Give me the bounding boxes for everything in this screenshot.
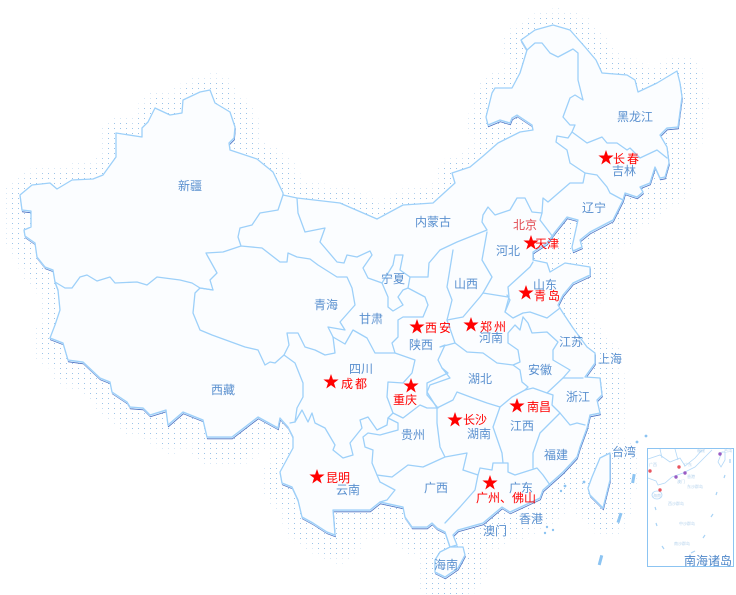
label: Liaoning: 辽宁 <box>582 200 606 215</box>
city: Xi'an: 西安 <box>425 320 453 335</box>
city: Kunming: 昆明 <box>326 471 350 485</box>
city: Tianjin: 天津 <box>535 237 559 251</box>
label: Fujian: 福建 <box>544 447 568 462</box>
inset title: 南海诸岛 <box>684 553 732 568</box>
city: Qingdao <box>518 285 562 303</box>
label: Sichuan: 四川 <box>349 362 373 376</box>
label: Hong Kong: 香港 <box>519 512 543 526</box>
city: Zhengzhou: 郑州 <box>480 319 508 334</box>
inset place names: 中沙群岛 <box>679 520 695 526</box>
city: Qingdao: 青岛 <box>534 288 562 303</box>
label: Anhui: 安徽 <box>528 362 552 377</box>
label: Gansu: 甘肃 <box>359 312 383 326</box>
label: Yunnan: 云南 <box>336 482 360 497</box>
label: Hubei: 湖北 <box>468 371 492 386</box>
label: Hunan: 湖南 <box>467 426 491 441</box>
city: Zhengzhou <box>463 317 508 334</box>
label: Jiangsu: 江苏 <box>559 335 583 349</box>
label: Tibet: 西藏 <box>211 383 235 397</box>
label: Guangdong: 广东 <box>509 481 533 495</box>
city: Kunming <box>309 469 350 485</box>
inset place names: 海南 <box>653 492 661 498</box>
label: Ningxia: 宁夏 <box>381 271 405 286</box>
city: Chengdu <box>323 374 369 391</box>
city: Nanchang <box>509 398 551 414</box>
label: Shaanxi: 陕西 <box>409 337 433 352</box>
label: Taiwan: 台湾 <box>612 444 636 459</box>
city: Tianjin <box>523 235 559 251</box>
city: Chengdu: 成都 <box>341 377 369 391</box>
province labels <box>178 110 653 572</box>
inset place names: 广西 <box>649 461 657 467</box>
inset place names: 西沙群岛 <box>668 500 684 506</box>
label: Guizhou: 贵州 <box>401 428 425 442</box>
city: Guangzhou and Foshan: 广州、佛山 <box>476 491 536 505</box>
label: Shanxi: 山西 <box>454 277 478 291</box>
label: Inner Mongolia: 内蒙古 <box>415 214 451 229</box>
city: Changsha <box>447 412 487 427</box>
inset place names: 东沙群岛 <box>687 483 703 489</box>
inset place names: 广东 <box>684 461 692 467</box>
label: Shanghai: 上海 <box>598 351 622 366</box>
label: Qinghai: 青海 <box>314 297 338 312</box>
inset coastline <box>648 449 725 499</box>
inset place names: 福建 <box>697 447 705 453</box>
inset place names: 南沙群岛 <box>674 540 690 546</box>
nine-dash line and offshore islands <box>544 435 647 565</box>
label: Guangxi: 广西 <box>424 481 448 495</box>
inset place names: 台湾 <box>724 447 732 453</box>
province borders <box>55 43 667 523</box>
city: Nanchang: 南昌 <box>527 399 551 414</box>
label: Xinjiang: 新疆 <box>178 178 202 193</box>
city: Changchun <box>598 150 641 166</box>
label: Macau: 澳门 <box>483 523 507 538</box>
inset place names <box>649 447 732 546</box>
inset place names: 香港 <box>687 473 695 479</box>
city: Chongqing <box>393 378 419 407</box>
label: Jilin: 吉林 <box>612 164 636 178</box>
label: Jiangxi: 江西 <box>510 419 534 433</box>
label: Hainan: 海南 <box>434 557 458 572</box>
label: Hebei: 河北 <box>496 244 520 258</box>
label: Beijing: 北京 <box>513 218 537 232</box>
city: Changsha: 长沙 <box>463 413 487 427</box>
inset: South China Sea islands <box>648 447 734 568</box>
inset dashes <box>655 459 730 553</box>
label: Henan: 河南 <box>479 330 503 345</box>
inset place names: 澳门 <box>677 478 685 484</box>
label: Heilongjiang: 黑龙江 <box>617 110 653 124</box>
city: Guangzhou and Foshan <box>476 475 536 505</box>
label: Zhejiang: 浙江 <box>566 390 590 404</box>
city markers <box>309 150 641 505</box>
city: Xi'an <box>409 319 453 335</box>
label: Shandong: 山东 <box>533 278 557 292</box>
city: Changchun: 长春 <box>613 152 641 166</box>
inset markers <box>648 452 722 492</box>
city: Chongqing: 重庆 <box>393 393 417 407</box>
